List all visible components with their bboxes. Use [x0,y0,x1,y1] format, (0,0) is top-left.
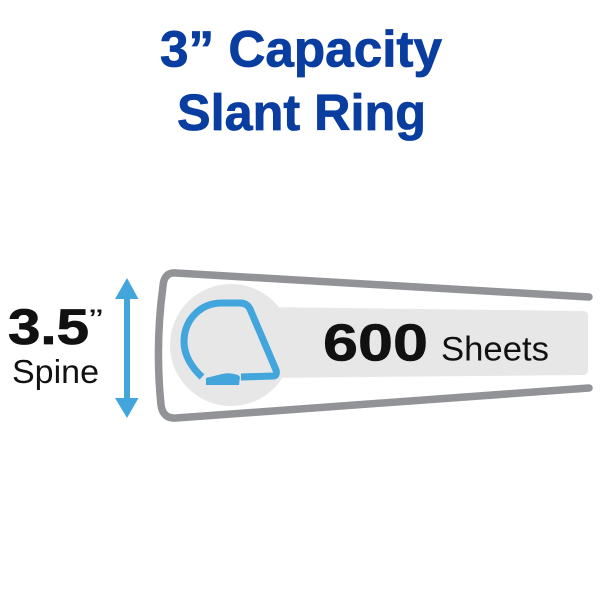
spine measurement label: ” [89,304,103,337]
spine measurement label [8,299,103,390]
title: 3” Capacity [160,20,443,78]
binder outline [158,273,589,418]
capacity panel [170,284,588,406]
icon: slant ring [184,303,276,385]
title [160,20,443,141]
sheet capacity label [323,314,549,372]
sheet capacity label: 600 [323,314,428,372]
arrow: spine height [115,278,138,418]
title: Slant Ring [177,84,426,141]
spine measurement label: Spine [12,353,99,390]
spine measurement label: 3.5 [8,299,89,355]
sheet capacity label: Sheets [441,330,549,368]
